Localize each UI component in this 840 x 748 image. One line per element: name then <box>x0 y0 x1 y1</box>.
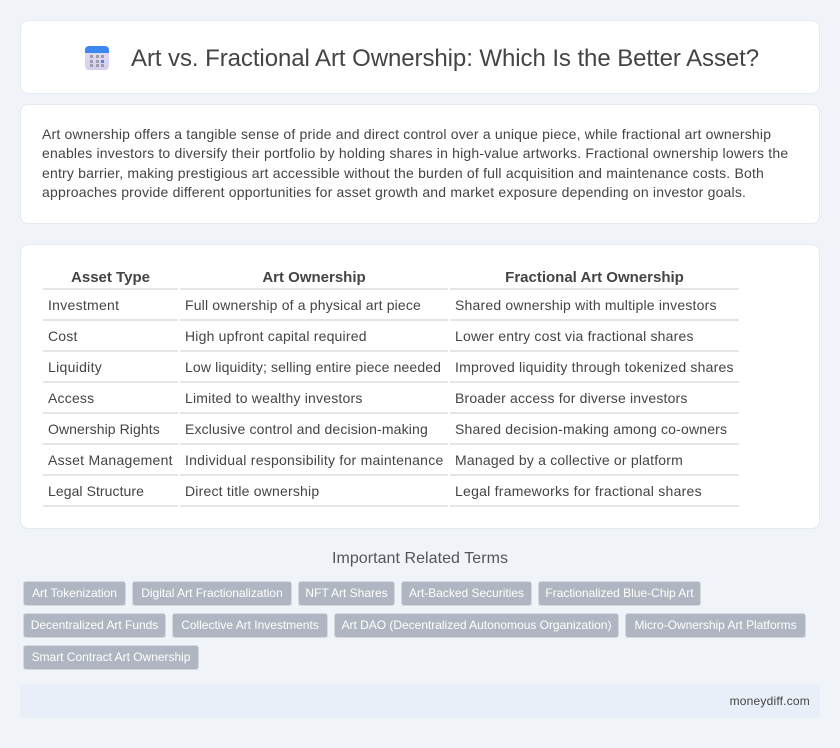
icon: calendar grid <box>85 46 109 70</box>
intro text panel <box>20 104 820 224</box>
tag <box>538 581 701 606</box>
tag: Art Tokenization <box>32 586 117 600</box>
tag <box>625 613 806 638</box>
tag <box>23 613 166 638</box>
row: liquidity: Improved liquidity through tokenized shares <box>455 359 734 375</box>
footer bar <box>20 684 820 718</box>
tag <box>334 613 619 638</box>
row: asset management: Managed by a collective or platform <box>455 452 683 468</box>
row: cost: Cost <box>48 328 78 344</box>
row: ownership rights <box>48 421 727 437</box>
tag <box>23 645 199 670</box>
row: cost: High upfront capital required <box>185 328 367 344</box>
row: liquidity: Low liquidity; selling entire piece needed <box>185 359 441 375</box>
row: asset management <box>48 452 683 468</box>
comparison table panel <box>20 244 820 529</box>
row: ownership rights: Ownership Rights <box>48 421 160 437</box>
tag: Micro-Ownership Art Platforms <box>634 618 797 632</box>
intro paragraph: enables investors to diversify their portfolio by holding shares in high-value artworks. Fractional ownership lowers the <box>42 145 788 161</box>
row: legal structure: Direct title ownership <box>185 483 319 499</box>
table header: fractional: Fractional Art Ownership <box>505 269 684 286</box>
intro paragraph: Art ownership offers a tangible sense of pride and direct control over a unique piece, while fractional art ownership <box>42 126 771 142</box>
tag: Art DAO (Decentralized Autonomous Organization) <box>342 618 611 632</box>
row: legal structure <box>48 483 702 499</box>
tag <box>23 581 126 606</box>
row: investment: Investment <box>48 297 119 313</box>
tag: Fractionalized Blue-Chip Art <box>545 586 694 600</box>
row: investment <box>48 297 717 313</box>
tag: NFT Art Shares <box>305 586 388 600</box>
row: access <box>48 390 688 406</box>
row: liquidity <box>48 359 734 375</box>
row: investment: Shared ownership with multiple investors <box>455 297 717 313</box>
row: access: Limited to wealthy investors <box>185 390 363 406</box>
tag: Decentralized Art Funds <box>31 618 158 632</box>
row: ownership rights: Shared decision-making among co-owners <box>455 421 727 437</box>
row: liquidity: Liquidity <box>48 359 102 375</box>
row: legal structure: Legal Structure <box>48 483 144 499</box>
tag: Smart Contract Art Ownership <box>32 650 190 664</box>
row: cost: Lower entry cost via fractional shares <box>455 328 694 344</box>
row: access: Broader access for diverse investors <box>455 390 688 406</box>
row: investment: Full ownership of a physical art piece <box>185 297 421 313</box>
row: asset management: Asset Management <box>48 452 173 468</box>
title: Art vs. Fractional Art Ownership: Which Is the Better Asset? <box>131 45 759 72</box>
related terms heading: Important Related Terms <box>332 550 508 567</box>
table header: asset type: Asset Type <box>71 269 150 286</box>
tag: Digital Art Fractionalization <box>141 586 283 600</box>
row: ownership rights: Exclusive control and decision-making <box>185 421 428 437</box>
intro paragraph: approaches provide different opportunities for asset growth and market exposure depending on investor goals. <box>42 184 746 200</box>
row: asset management: Individual responsibility for maintenance <box>185 452 444 468</box>
header panel <box>20 20 820 94</box>
row: cost <box>48 328 694 344</box>
tag <box>298 581 395 606</box>
table header: art ownership: Art Ownership <box>262 269 366 286</box>
tag: Art-Backed Securities <box>409 586 524 600</box>
footer source label: moneydiff.com <box>730 694 810 708</box>
tag: Collective Art Investments <box>181 618 319 632</box>
intro paragraph <box>42 126 788 200</box>
tag <box>132 581 292 606</box>
row: legal structure: Legal frameworks for fractional shares <box>455 483 702 499</box>
row: access: Access <box>48 390 94 406</box>
tag <box>172 613 328 638</box>
intro paragraph: entry barrier, making prestigious art accessible without the burden of full acquisition and maintenance costs. Both <box>42 165 764 181</box>
tag <box>401 581 532 606</box>
